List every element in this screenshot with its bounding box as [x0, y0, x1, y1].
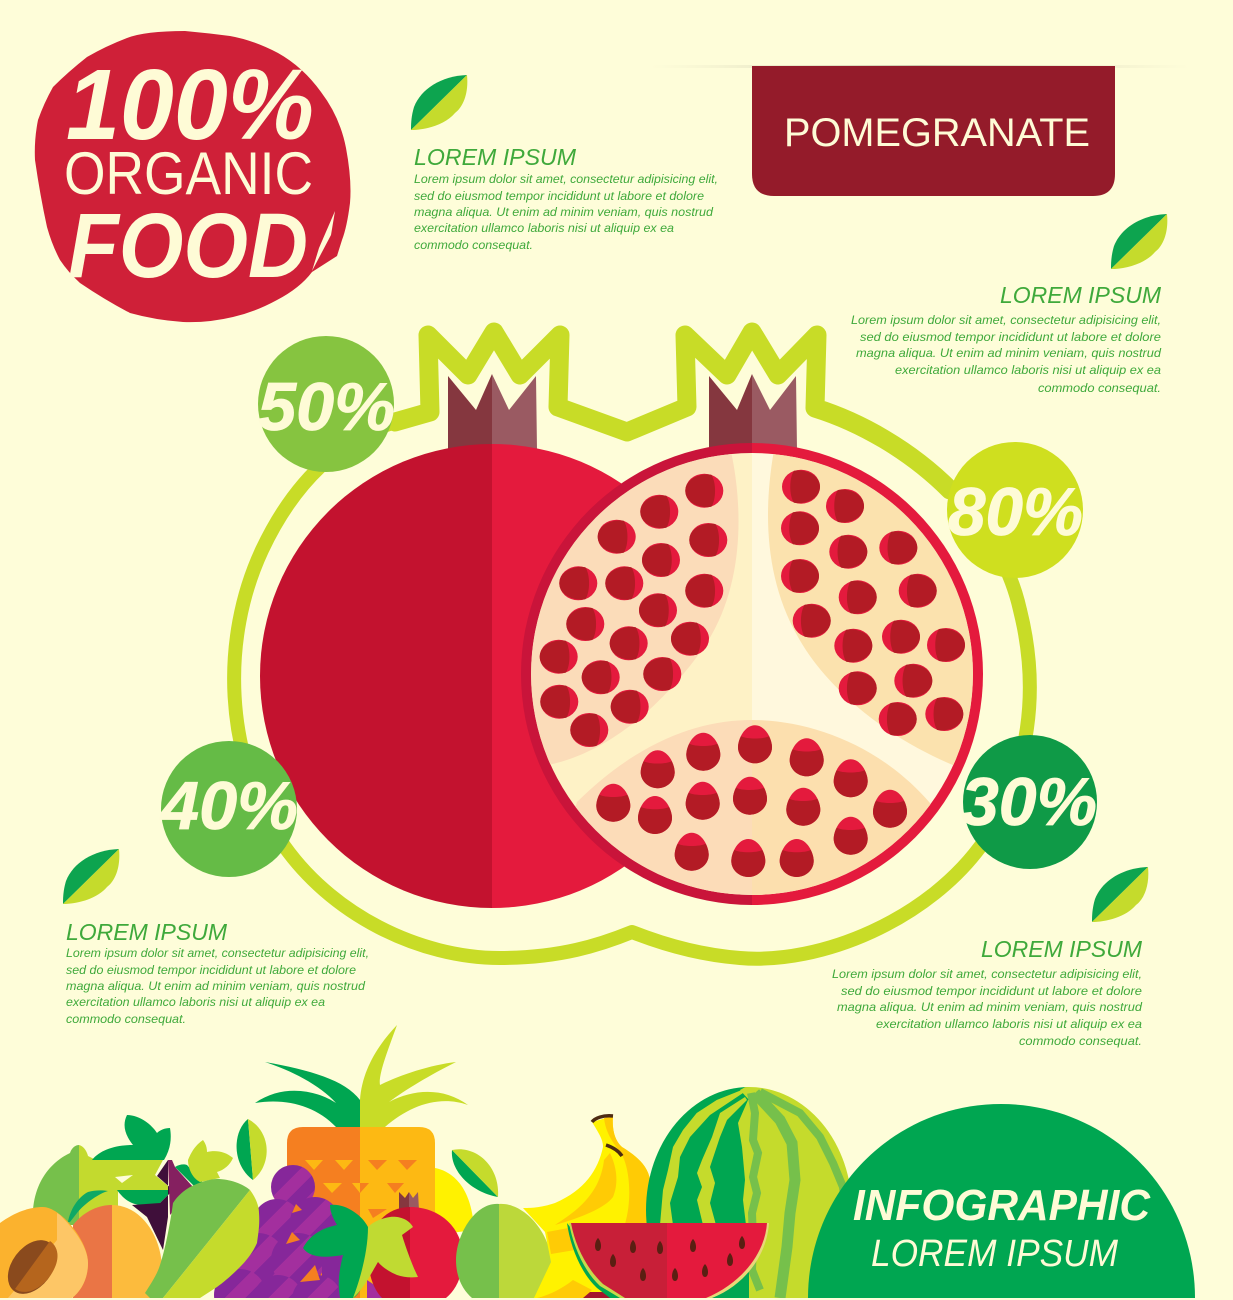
percentage: 40%	[159, 741, 298, 877]
segment: left	[531, 454, 738, 764]
text block: lower left	[66, 919, 369, 1026]
text block: top centre	[414, 144, 718, 252]
percentage: 80%	[947, 442, 1083, 578]
whole pomegranate	[260, 374, 724, 908]
badge: 100% organic food	[35, 31, 351, 322]
text block: lower right	[832, 936, 1143, 1048]
text block: top right	[851, 282, 1162, 395]
infographic circle label: LOREM IPSUM	[871, 1233, 1118, 1275]
small pomegranate	[368, 1192, 463, 1298]
crown of cut pomegranate	[709, 374, 797, 450]
lemon behind	[435, 1168, 474, 1235]
seeds: left segment	[540, 474, 727, 747]
watermelon slice	[567, 1223, 769, 1298]
seeds: bottom segment	[596, 725, 907, 877]
text block: top centre: commodo consequat.	[414, 238, 533, 252]
text block: lower left: exercitation ullamco laboris nisi ut aliquip ex ea	[66, 995, 325, 1009]
text block: top right: sed do eiusmod tempor incididunt ut labore et dolore	[860, 330, 1161, 344]
percentage: 80%: 80%	[948, 474, 1083, 550]
infographic circle label: INFOGRAPHIC	[853, 1181, 1151, 1230]
purple fruit	[132, 1160, 205, 1250]
percentage: 50%	[258, 336, 395, 472]
green banded fruit with leaves	[79, 1115, 173, 1206]
segment: right	[768, 454, 973, 766]
melon seeds	[595, 1236, 745, 1281]
icon: leaf top right	[1111, 214, 1167, 269]
text block: top right: magna aliqua. Ut enim ad minim veniam, quis nostrud	[856, 346, 1161, 360]
text block: lower left: magna aliqua. Ut enim ad minim veniam, quis nostrud	[66, 979, 365, 993]
text block: top centre: magna aliqua. Ut enim ad minim veniam, quis nostrud	[414, 205, 713, 219]
icon: leaf lower left	[63, 849, 119, 904]
text block: top right: Lorem ipsum dolor sit amet, consectetur adipisicing elit,	[851, 313, 1161, 327]
whole watermelon	[646, 1087, 849, 1298]
icon: leaf lower right	[1092, 867, 1148, 922]
text block: lower right: exercitation ullamco laboris nisi ut aliquip ex ea	[876, 1017, 1142, 1031]
badge: 100% organic food: 100%	[66, 49, 314, 161]
title banner: pomegranate	[650, 65, 1190, 196]
text block: lower left: sed do eiusmod tempor incididunt ut labore et dolore	[66, 963, 356, 977]
segment: bottom	[576, 720, 930, 895]
green outline around the fruits	[234, 332, 1030, 959]
text block: lower right: LOREM IPSUM	[981, 936, 1143, 962]
text block: top right: exercitation ullamco laboris nisi ut aliquip ex ea	[895, 363, 1161, 377]
infographic circle label	[808, 1104, 1195, 1298]
title banner: pomegranate: POMEGRANATE	[784, 111, 1090, 155]
text block: lower right: Lorem ipsum dolor sit amet, consectetur adipisicing elit,	[832, 967, 1142, 981]
text block: lower right: commodo consequat.	[1019, 1034, 1142, 1048]
lime: back left	[33, 1145, 118, 1225]
badge: 100% organic food: ORGANIC	[64, 140, 313, 207]
leaf beside green fruit	[452, 1149, 498, 1197]
fruit row	[0, 1025, 859, 1300]
text block: top centre: LOREM IPSUM	[414, 144, 577, 170]
grapes	[214, 1165, 382, 1300]
pineapple crown	[255, 1025, 468, 1127]
text block: lower right: sed do eiusmod tempor incididunt ut labore et dolore	[841, 984, 1142, 998]
percentage: 50%: 50%	[258, 369, 395, 445]
text block: lower left: commodo consequat.	[66, 1012, 186, 1026]
percentage: 30%	[961, 735, 1097, 869]
text block: top right: LOREM IPSUM	[1000, 282, 1162, 308]
mango	[145, 1179, 259, 1298]
crown of whole pomegranate	[448, 374, 537, 450]
text block: lower left: Lorem ipsum dolor sit amet, consectetur adipisicing elit,	[66, 946, 369, 960]
pineapple	[255, 1025, 468, 1298]
peach: cut half with pit	[0, 1207, 88, 1300]
banana	[523, 1116, 650, 1298]
peach: whole behind	[68, 1190, 162, 1298]
green fruit	[456, 1204, 551, 1298]
icon: leaf top centre	[411, 75, 467, 130]
cut pomegranate	[521, 374, 983, 905]
text block: top centre: Lorem ipsum dolor sit amet, consectetur adipisicing elit,	[414, 172, 718, 186]
lime leaf cluster	[188, 1140, 233, 1182]
badge: 100% organic food: FOOD	[68, 195, 308, 297]
text block: top centre: sed do eiusmod tempor incididunt ut labore et dolore	[414, 189, 704, 203]
percentage: 30%: 30%	[961, 764, 1097, 840]
percentage: 40%: 40%	[159, 768, 298, 844]
seeds: right segment	[781, 470, 965, 736]
text block: top centre: exercitation ullamco laboris nisi ut aliquip ex ea	[414, 221, 674, 235]
text block: lower left: LOREM IPSUM	[66, 919, 228, 945]
strawberry leaf	[303, 1205, 418, 1298]
text block: lower right: magna aliqua. Ut enim ad minim veniam, quis nostrud	[837, 1000, 1142, 1014]
floating leaf	[237, 1119, 267, 1180]
text block: top right: commodo consequat.	[1038, 381, 1161, 395]
